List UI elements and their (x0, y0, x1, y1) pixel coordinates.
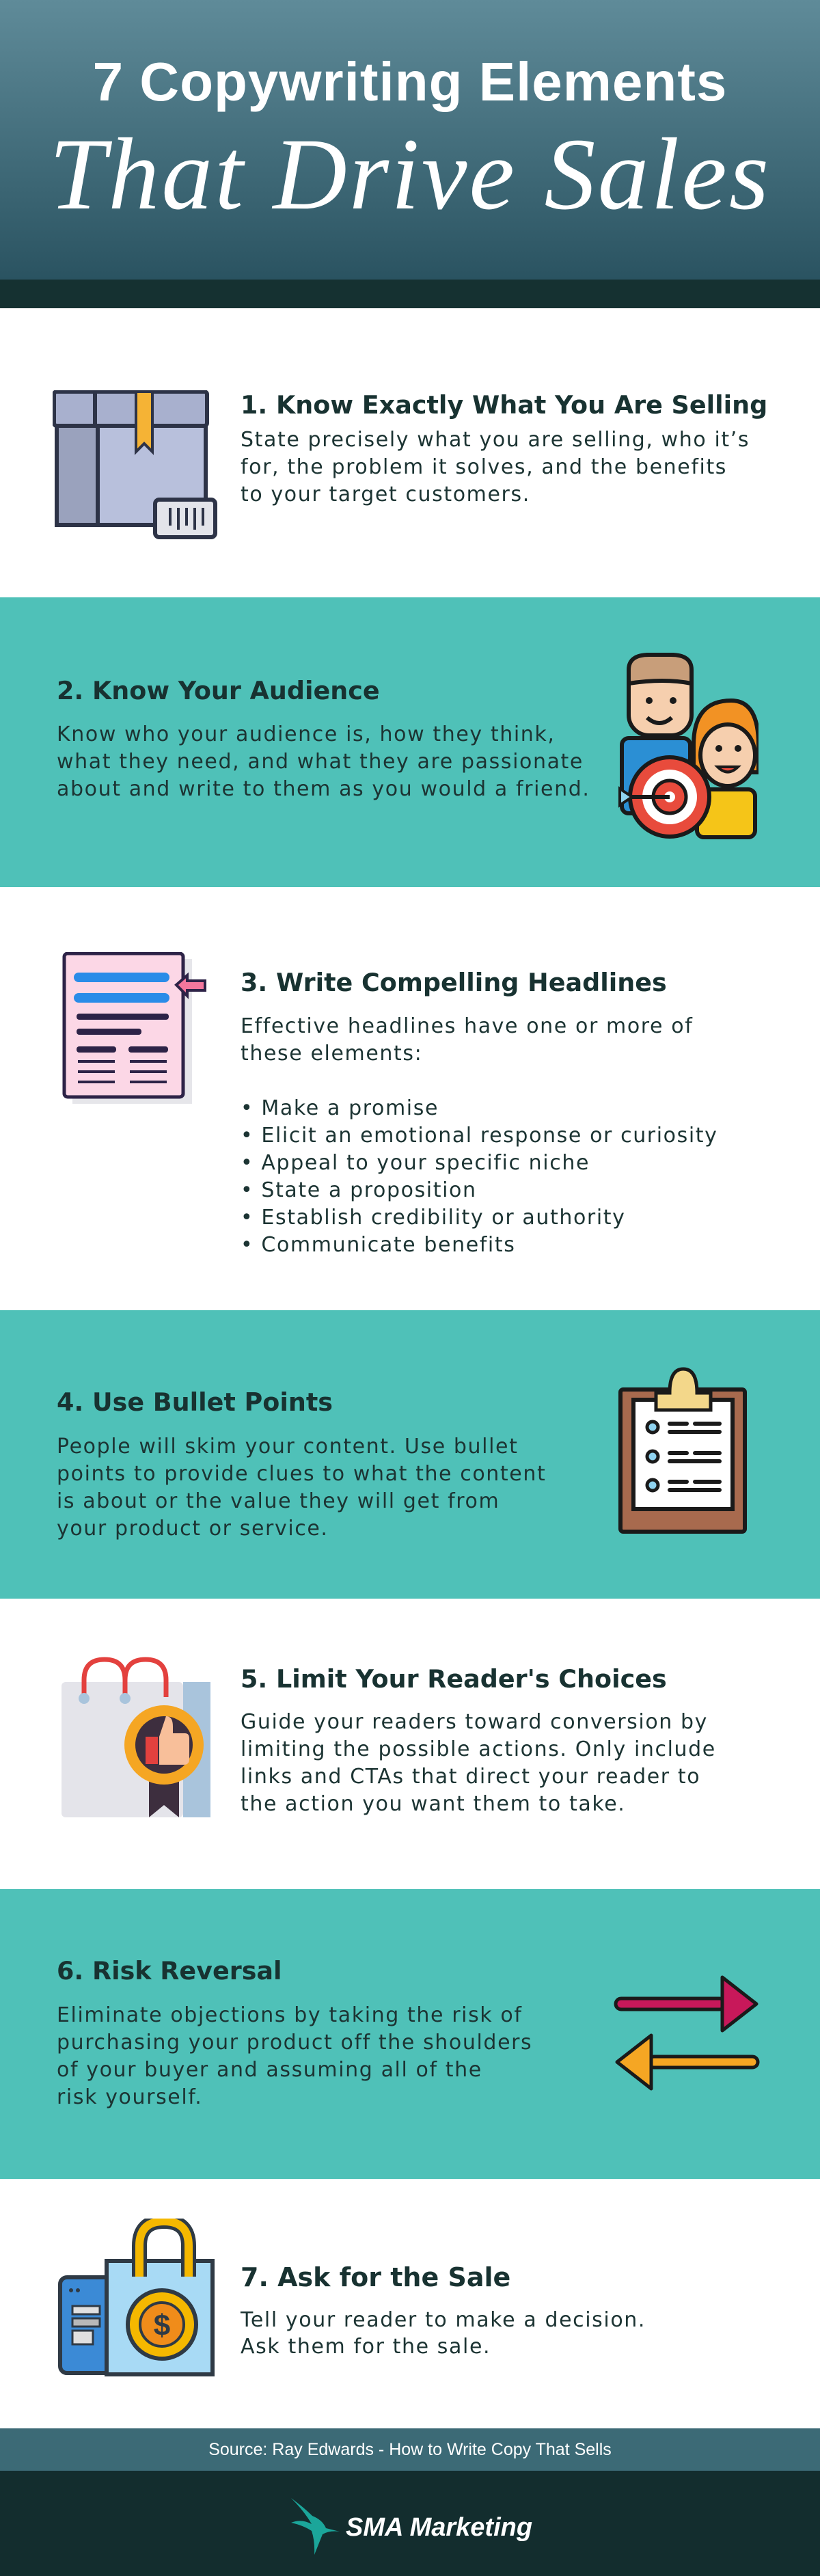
heading 2: 2. Know Your Audience (57, 676, 380, 705)
text 6 (57, 2003, 532, 2109)
footer (0, 2471, 820, 2576)
text 7: Ask them for the sale. (241, 2335, 491, 2359)
text 3 with bullet list: these elements: (241, 1042, 422, 1066)
text 2: Know who your audience is, how they think, (57, 722, 556, 746)
text 3 with bullet list (241, 1014, 718, 1257)
icon: clipboard (618, 1367, 747, 1534)
icon: document (63, 952, 206, 1104)
logo text: SMA Marketing (346, 2513, 532, 2542)
text 5: Guide your readers toward conversion by (241, 1710, 708, 1734)
text 7 (241, 2308, 646, 2359)
header (0, 0, 820, 280)
title line 1: 7 Copywriting Elements (93, 51, 727, 112)
text 3 with bullet list: • Make a promise (241, 1096, 439, 1120)
logo (291, 2498, 532, 2555)
text 3 with bullet list: • Establish credibility or authority (241, 1206, 626, 1230)
panel: 7 ask for the sale (58, 2219, 646, 2376)
text 1: State precisely what you are selling, who it’s (241, 428, 750, 452)
source bar: Source: Ray Edwards - How to Write Copy That Sells (208, 2440, 612, 2459)
text 3 with bullet list: • Elicit an emotional response or curiosity (241, 1124, 718, 1148)
text 1: to your target customers. (241, 483, 530, 506)
source bar (0, 2428, 820, 2471)
text 2: about and write to them as you would a friend. (57, 777, 590, 801)
text 4: points to provide clues to what the content (57, 1462, 546, 1486)
icon: exchange arrows (614, 1975, 760, 2090)
heading 5: 5. Limit Your Reader's Choices (241, 1664, 667, 1694)
dark strip (0, 280, 820, 308)
icon: bag with badge (62, 1657, 210, 1817)
text 3 with bullet list: • Communicate benefits (241, 1233, 515, 1257)
panel: 6 risk reversal (0, 1889, 820, 2179)
text 1 (241, 428, 750, 506)
text 5: links and CTAs that direct your reader to (241, 1765, 700, 1789)
heading 4: 4. Use Bullet Points (57, 1387, 333, 1417)
panel: 3 compelling headlines (63, 952, 718, 1257)
icon: hummingbird (291, 2498, 339, 2555)
text 5 (241, 1710, 716, 1816)
text 4 (57, 1435, 546, 1541)
text 4: your product or service. (57, 1517, 329, 1541)
text 6: Eliminate objections by taking the risk of (57, 2003, 523, 2027)
panel: 4 bullet points (0, 1310, 820, 1599)
heading 3: 3. Write Compelling Headlines (241, 968, 667, 997)
heading 7: 7. Ask for the Sale (241, 2262, 510, 2292)
text 6: of your buyer and assuming all of the (57, 2058, 482, 2082)
panel: 2 know your audience (0, 597, 820, 887)
text 6: risk yourself. (57, 2085, 202, 2109)
text 5: limiting the possible actions. Only include (241, 1737, 716, 1761)
text 4: People will skim your content. Use bullet (57, 1435, 518, 1459)
heading 1: 1. Know Exactly What You Are Selling (241, 390, 767, 420)
text 3 with bullet list: • Appeal to your specific niche (241, 1151, 590, 1175)
text 5: the action you want them to take. (241, 1792, 625, 1816)
text 2 (57, 722, 590, 801)
text 3 with bullet list: • State a proposition (241, 1178, 477, 1202)
icon: shopping bag with coin (58, 2219, 215, 2376)
icon: box (53, 390, 217, 539)
panel: 1 know what you are selling (53, 390, 767, 539)
text 2: what they need, and what they are passionate (57, 750, 584, 774)
text 3 with bullet list: Effective headlines have one or more of (241, 1014, 693, 1038)
text 1: for, the problem it solves, and the benefits (241, 455, 727, 479)
text 4: is about or the value they will get from (57, 1489, 500, 1513)
title line 2 script: That Drive Sales (49, 118, 771, 231)
text 6: purchasing your product off the shoulders (57, 2031, 532, 2055)
icon: people with target (618, 653, 758, 839)
heading 6: 6. Risk Reversal (57, 1956, 282, 1985)
text 7: Tell your reader to make a decision. (241, 2308, 646, 2332)
panel: 5 limit choices (62, 1657, 716, 1817)
icon: shopping bag with coin: $ (154, 2309, 170, 2342)
